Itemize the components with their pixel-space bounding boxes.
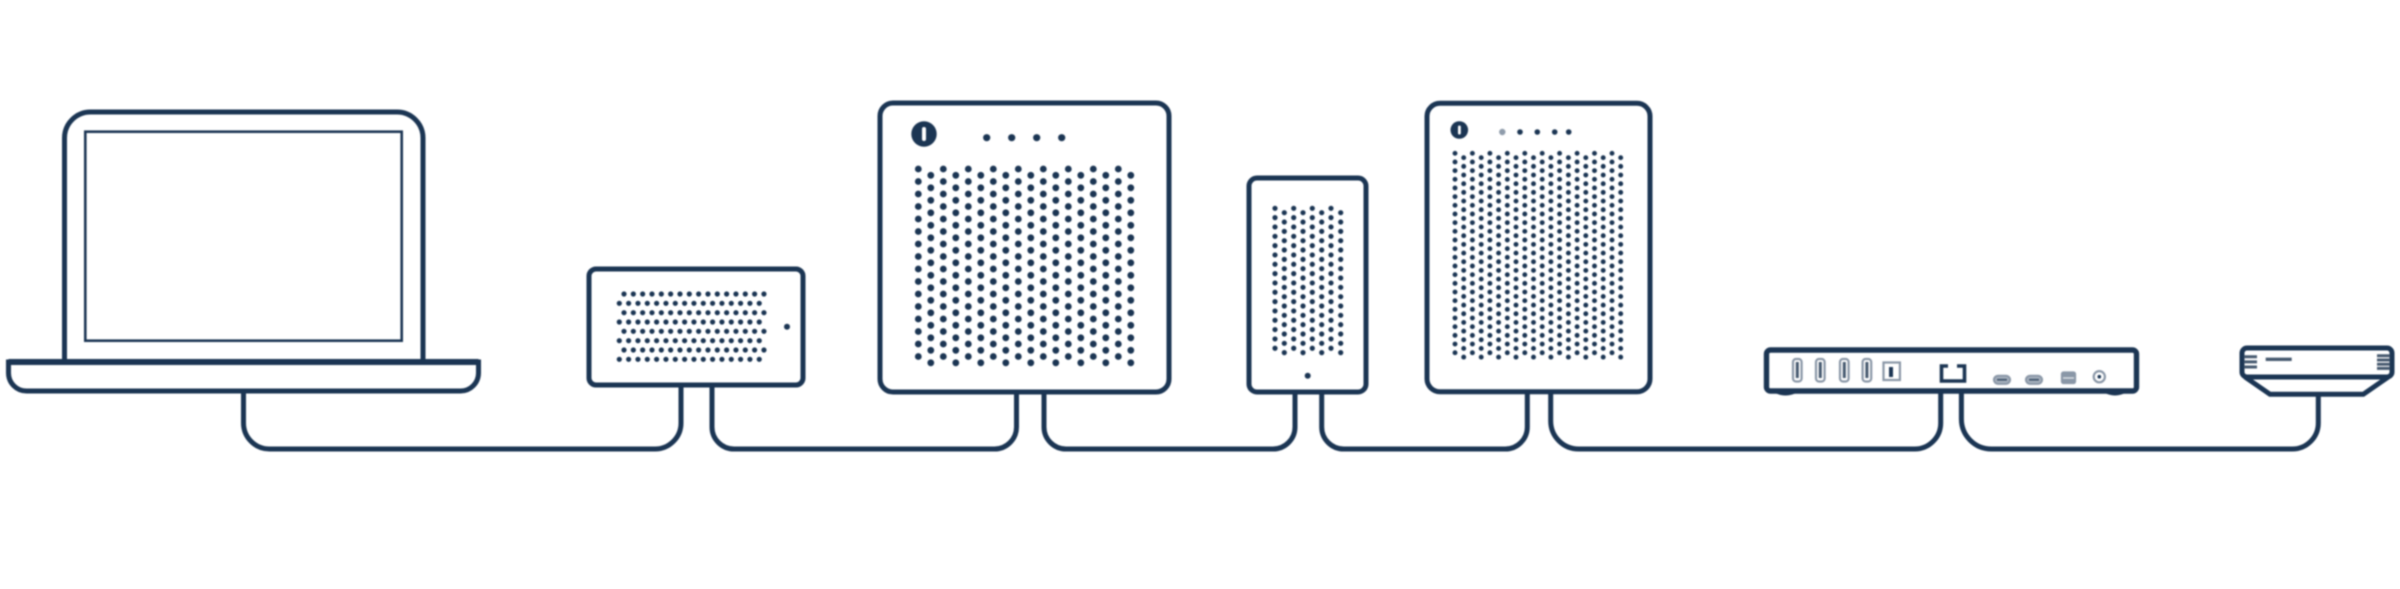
vents and slot	[2244, 356, 2390, 368]
icon: second large drive	[1427, 103, 1650, 392]
dock feet	[1773, 392, 2127, 396]
cable: portable drive to second large drive	[1322, 392, 1527, 449]
cable: second large drive to dock	[1551, 392, 1941, 449]
logo badge	[1450, 121, 1468, 139]
icon: laptop	[8, 112, 478, 391]
icon: thunderbolt dock	[1766, 350, 2136, 396]
cable: dock to mini computer	[1961, 392, 2318, 449]
icon: small horizontal drive	[589, 269, 803, 385]
status lights	[1499, 129, 1571, 135]
icon: tall portable drive	[1249, 178, 1366, 392]
icon: mini computer	[2242, 348, 2392, 394]
logo badge	[911, 121, 937, 147]
cable: small drive to large drive	[712, 385, 1016, 449]
dock ports	[1793, 359, 2105, 384]
cable: laptop to small dock	[244, 385, 681, 449]
cable: large drive to portable drive	[1044, 392, 1295, 449]
status lights	[983, 134, 1065, 141]
icon: large four-bay drive	[880, 103, 1169, 392]
